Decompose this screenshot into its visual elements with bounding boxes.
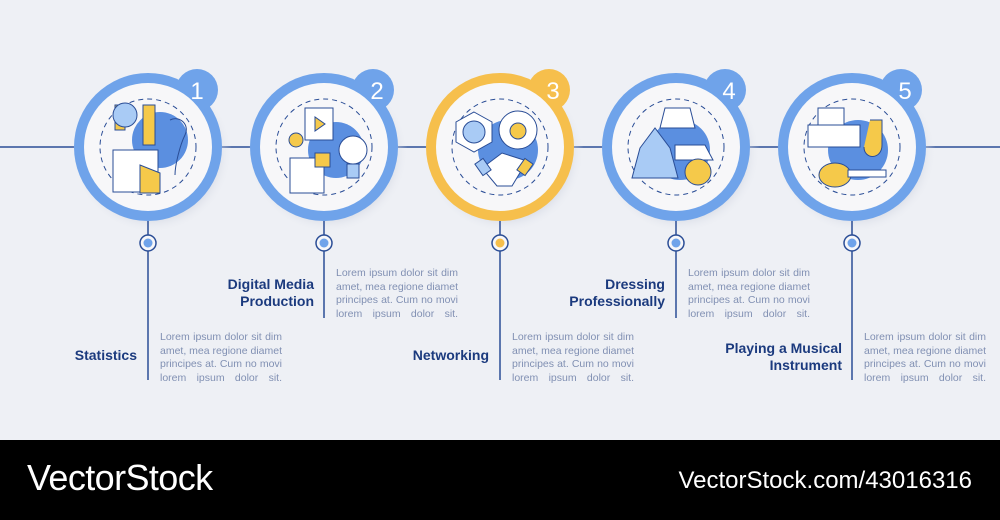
text: Digital Media body: Lorem ipsum dolor sit dim amet, mea regione diamet principes at. Cum no movi lorem ipsum dolor sit. (336, 267, 458, 320)
footer logo: VectorStock (27, 457, 212, 498)
text: Musical body: Lorem ipsum dolor sit dim amet, mea regione diamet principes at. Cum no movi lorem ipsum dolor sit. (864, 331, 986, 384)
text: Networking body: Lorem ipsum dolor sit dim amet, mea regione diamet principes at. Cum no movi lorem ipsum dolor sit. (512, 331, 634, 384)
step 2: 2 (370, 78, 384, 105)
title: Playing a Musical Instrument: Playing a Musical (725, 340, 842, 356)
text: Dressing body: Lorem ipsum dolor sit dim amet, mea regione diamet principes at. Cum no movi lorem ipsum dolor sit. (688, 267, 810, 320)
step 5 (776, 69, 936, 380)
step 2 (248, 69, 408, 318)
title: Playing a Musical Instrument: Instrument (770, 357, 842, 373)
footer url: VectorStock.com/43016316 (678, 467, 972, 494)
step 1: 1 (190, 78, 204, 105)
title: Statistics: Statistics (75, 347, 137, 363)
title: Playing a Musical Instrument (725, 340, 842, 373)
title: Digital Media Production: Digital Media (228, 276, 314, 292)
step 1 (72, 69, 232, 380)
title: Digital Media Production: Production (240, 293, 314, 309)
step 4: 4 (722, 78, 736, 105)
step 3 (424, 69, 584, 380)
title: Dressing Professionally: Professionally (569, 293, 665, 309)
title: Dressing Professionally: Dressing (605, 276, 665, 292)
step 4 (600, 69, 760, 318)
step 3: 3 (546, 78, 560, 105)
title: Dressing Professionally (569, 276, 665, 309)
title: Digital Media Production (228, 276, 314, 309)
text: Statistics body: Lorem ipsum dolor sit dim amet, mea regione diamet principes at. Cum no movi lorem ipsum dolor sit. (160, 331, 282, 384)
title: Networking: Networking (413, 347, 489, 363)
footer bar (0, 440, 1000, 520)
step 5: 5 (898, 78, 912, 105)
